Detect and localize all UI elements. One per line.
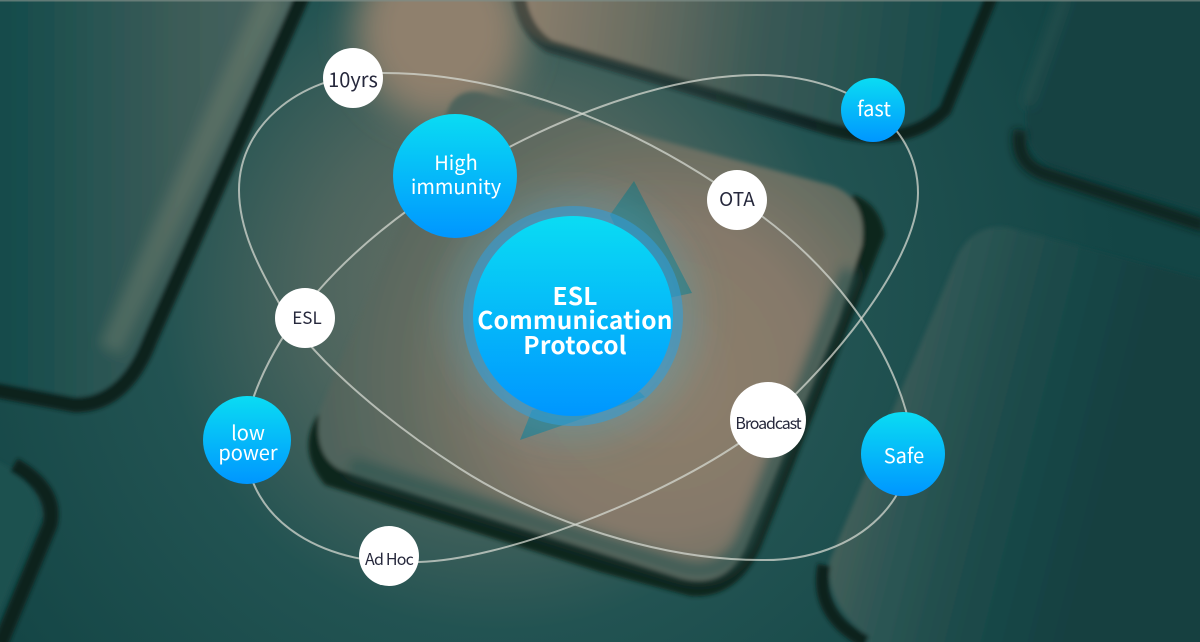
orbit: fast to low power bbox=[245, 75, 918, 563]
node: High immunity: immunity bbox=[411, 171, 502, 200]
node: Ad Hoc bbox=[359, 526, 419, 586]
node: 10yrs: 10yrs bbox=[328, 64, 378, 93]
node: OTA: OTA bbox=[719, 185, 755, 212]
key: centre bbox=[309, 92, 885, 596]
key: top right bbox=[1019, 0, 1200, 226]
node: Safe bbox=[861, 412, 945, 496]
node: OTA bbox=[707, 170, 767, 230]
node: fast: fast bbox=[857, 93, 891, 122]
orbit lines bbox=[239, 73, 918, 563]
arrow up bbox=[610, 181, 692, 302]
node: low power: low bbox=[231, 417, 265, 446]
hub title: Protocol bbox=[523, 327, 627, 362]
node: Ad Hoc: Ad Hoc bbox=[365, 546, 414, 570]
hub title: Communication bbox=[477, 302, 673, 337]
key: top centre bbox=[515, 0, 995, 136]
node: low power: power bbox=[218, 437, 278, 466]
key: bottom left small bbox=[0, 460, 51, 642]
node: ESL: ESL bbox=[292, 304, 322, 329]
node: High immunity bbox=[393, 114, 517, 238]
node: ESL bbox=[275, 288, 335, 348]
key: top left bbox=[0, 0, 303, 405]
node: High immunity: High bbox=[434, 147, 478, 176]
orbit: 10yrs to Safe bbox=[239, 73, 911, 560]
node: Broadcast: Broadcast bbox=[735, 410, 802, 434]
arrow down bbox=[520, 392, 645, 440]
key: bottom right bbox=[822, 227, 1200, 642]
centre hub bbox=[448, 191, 698, 441]
node: 10yrs bbox=[323, 48, 383, 108]
hub title: ESL bbox=[552, 278, 598, 313]
node: fast bbox=[841, 78, 905, 142]
node: Broadcast bbox=[730, 382, 806, 458]
node: Safe: Safe bbox=[884, 440, 924, 469]
node: low power bbox=[203, 396, 291, 484]
